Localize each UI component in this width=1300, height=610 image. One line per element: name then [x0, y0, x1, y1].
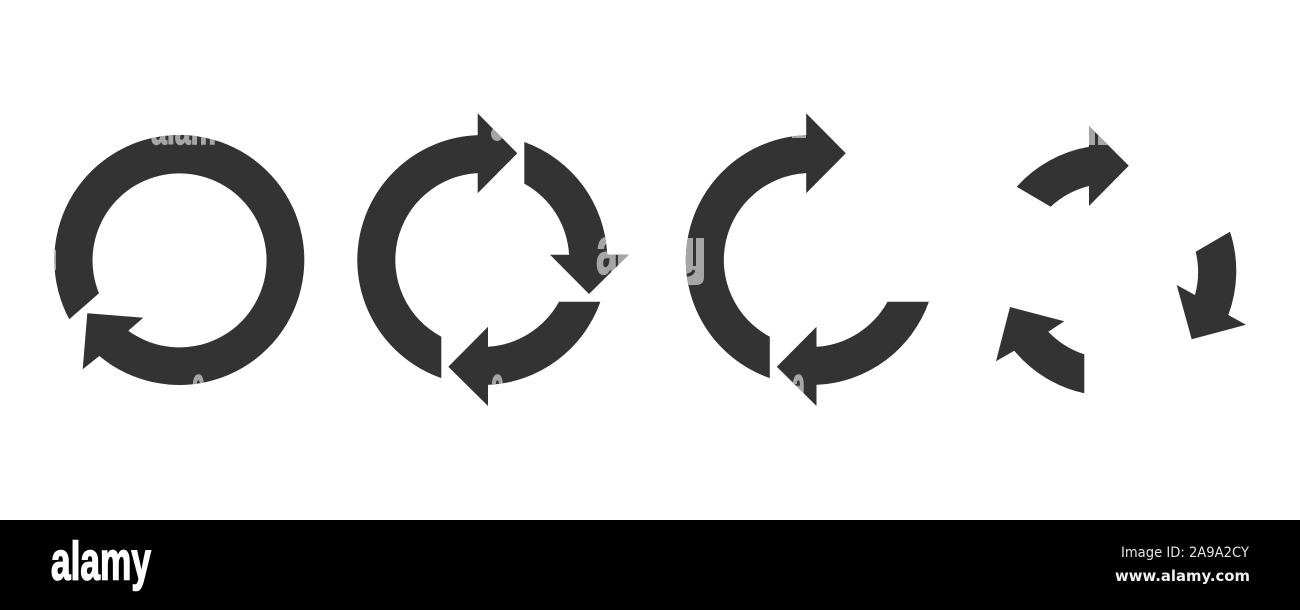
- watermark fragments: a: [192, 357, 205, 415]
- logo: alamy: alamy: [51, 532, 151, 592]
- arrow: left arc pointing right: [357, 113, 517, 378]
- arrow: bottom pointing up-left: [996, 307, 1084, 393]
- watermark on right arrow: [596, 237, 628, 276]
- image id: Image ID: 2A9A2CY: [1121, 545, 1249, 561]
- arrow: right arc pointing down: [524, 142, 629, 294]
- watermark fragments: [54, 135, 215, 384]
- icon: two arrow cycle: [684, 113, 929, 415]
- icon: three arrow cycle: [357, 113, 630, 415]
- watermark on left arrow: [684, 130, 806, 285]
- watermark fragments: alam: [151, 106, 216, 153]
- icon: two arrow cycle: a: [792, 357, 805, 415]
- footer bar: [0, 520, 1300, 610]
- arrow: right pointing down: [1177, 232, 1246, 339]
- arrow: top pointing right: [1017, 126, 1129, 207]
- watermark on top arrow: [491, 128, 502, 141]
- arrow: ring with one head: [54, 135, 304, 385]
- icon: three arrow cycle: a: [491, 357, 504, 415]
- arrow: bottom arc pointing left: [777, 302, 929, 406]
- watermark on top arrow: [1089, 126, 1108, 145]
- watermark on right arrow: a: [596, 213, 619, 289]
- website url: www.alamy.com: [1115, 567, 1250, 585]
- icon: single circular arrow: [54, 135, 304, 385]
- arrow: left arc pointing right: [686, 113, 846, 378]
- arrow: bottom arc pointing left: [448, 302, 600, 406]
- icon: three separated arrows: [996, 124, 1246, 393]
